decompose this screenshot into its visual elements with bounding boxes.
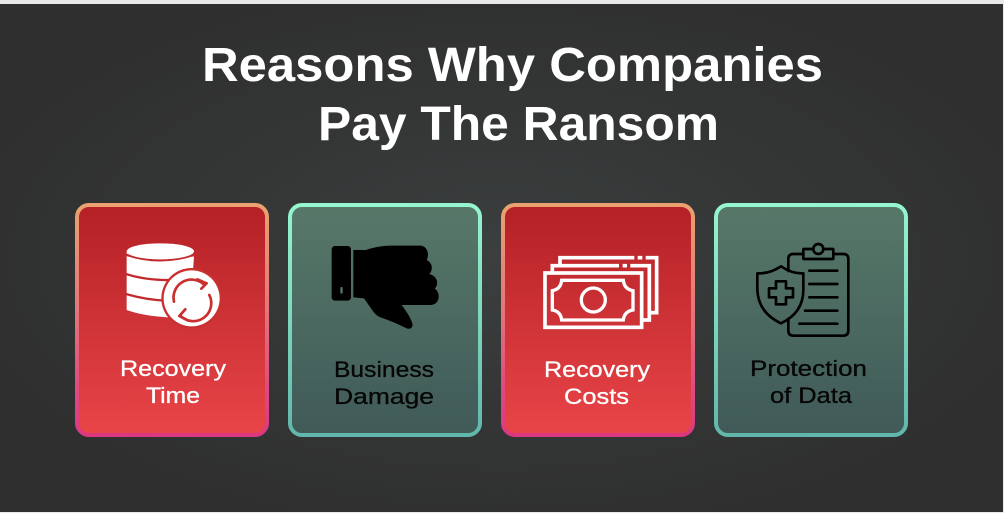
label: recovery costs: Costs [564,384,629,409]
icon: shield and clipboard [757,244,848,336]
label: recovery time: Recovery [120,356,226,381]
title: Pay The Ransom [318,98,719,151]
label: recovery time: Time [146,383,200,408]
icon: thumbs down [332,246,439,329]
title [202,39,823,151]
icon: banknotes [545,258,657,327]
panel: business damage [290,205,480,435]
label: recovery costs: Recovery [544,357,650,382]
label: recovery time [120,356,226,408]
label: business damage: Damage [334,384,434,409]
icon: database with sync arrows [126,243,222,329]
label: business damage [334,357,434,409]
label: protection of data [750,356,867,408]
label: recovery costs [544,357,650,409]
label: protection of data: of Data [770,383,853,408]
panel: recovery costs [503,205,693,435]
label: protection of data: Protection [750,356,867,381]
panel: protection of data [716,205,906,435]
label: business damage: Business [334,357,434,382]
panel: recovery time [77,205,267,435]
title: Reasons Why Companies [202,39,823,92]
